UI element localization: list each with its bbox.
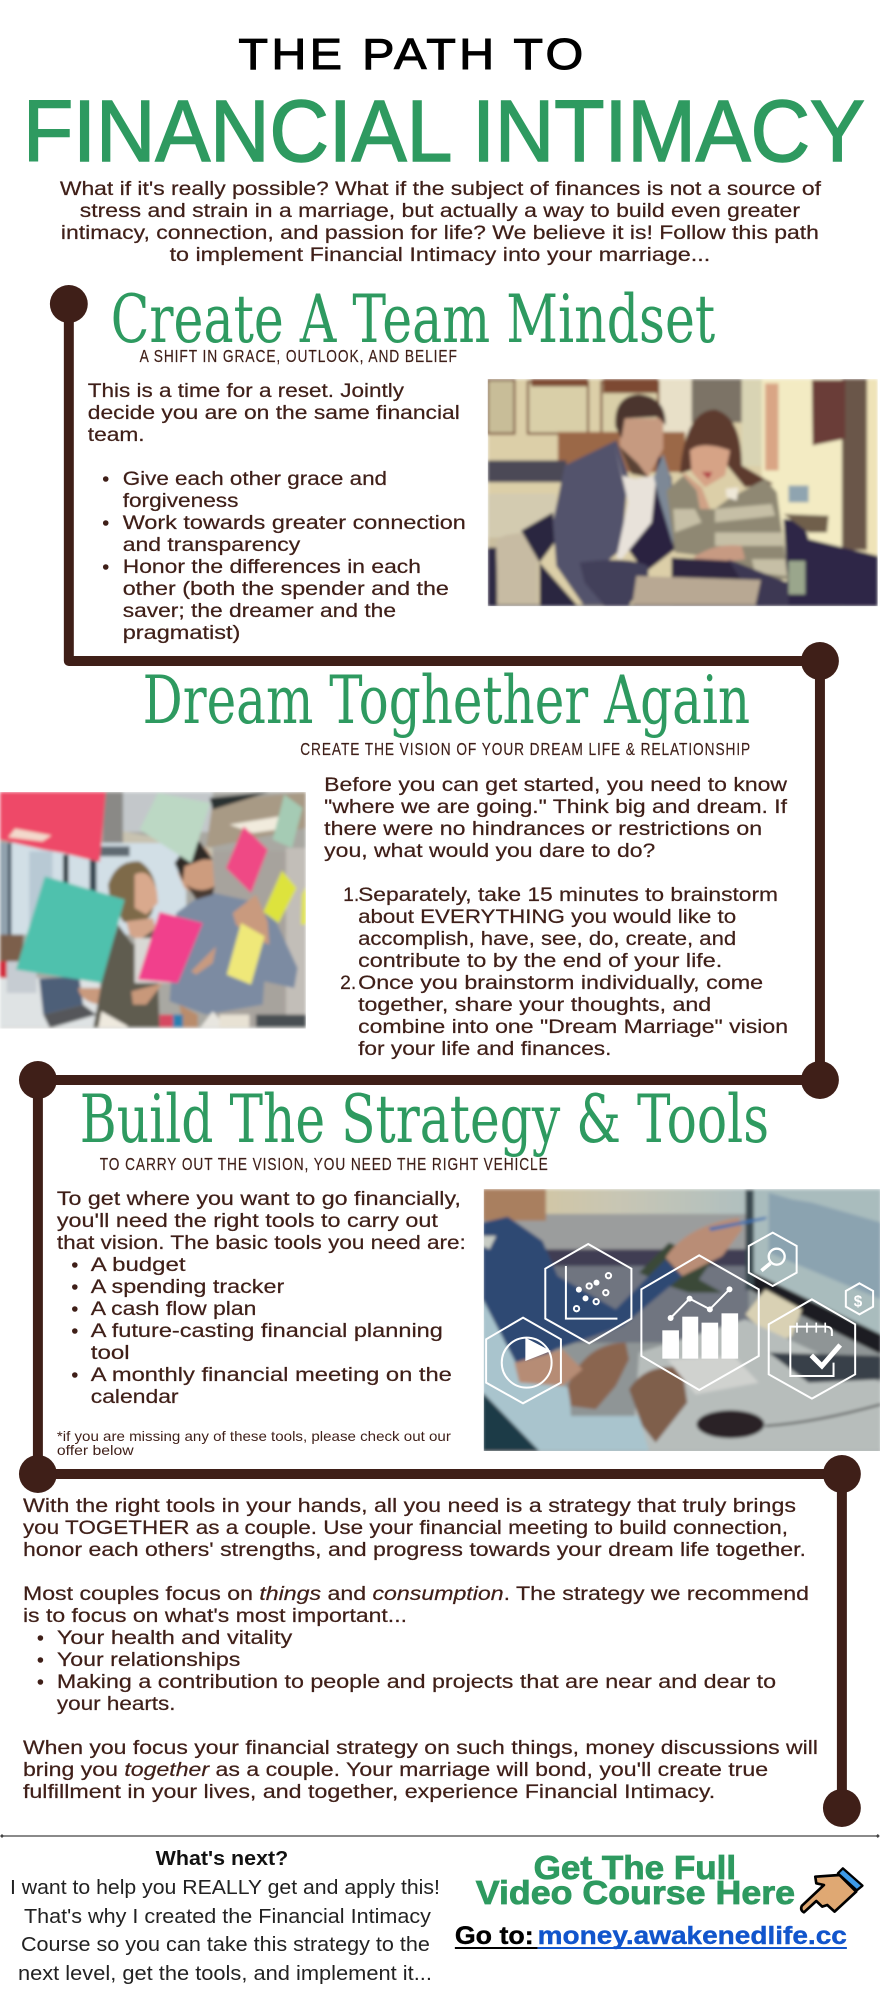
footnote: offer below [57,1443,134,1458]
section 2 body text: Once you brainstorm individually, come [358,972,763,994]
icon: pointing hand [801,1868,862,1912]
section 3 body text: A cash flow plan [91,1298,256,1320]
intro text block: stress and strain in a marriage, but actually a way to build even greater [80,200,801,222]
strategy body text: Most couples focus on things and consumption . The strategy we recommend [23,1583,809,1605]
section 2 body text: accomplish, have, see, do, create, and [358,928,736,950]
intro text block [60,178,822,266]
subheading: create the vision: CREATE THE VISION OF YOUR DREAM LIFE & RELATIONSHIP [300,739,751,759]
strategy body text: Your relationships [57,1649,240,1671]
footnote [57,1429,451,1458]
section 2 body text: contribute to by the end of your life. [358,950,722,972]
strategy body text: your hearts. [57,1693,176,1715]
section 3 body text: tool [91,1342,130,1364]
strategy body text: is to focus on what's most important... [23,1605,407,1627]
go to link: Go to: [455,1922,534,1950]
call to action: get the full video course: Get The Full [534,1849,736,1886]
call to action: get the full video course: Video Course Here [476,1874,795,1911]
section 2 body text: 2. [340,972,356,994]
divider line [0,1834,880,1838]
what's next text block: Course so you can take this strategy to the [21,1933,430,1956]
photo: couple at laptop [488,379,878,606]
section 3 body text: you'll need the right tools to carry out [57,1210,439,1232]
section 3 body text: A monthly financial meeting on the [91,1364,452,1386]
section 1 body text: other (both the spender and the [123,578,449,600]
section 1 body text: and transparency [123,534,301,556]
what's next text block: That's why I created the Financial Intimacy [24,1905,432,1928]
strategy body text: honor each others' strengths, and progress towards your dream life together. [23,1539,806,1561]
what's next text block [10,1847,440,1985]
section 1 body text: Work towards greater connection [123,512,466,534]
strategy body text: Your health and vitality [57,1627,293,1649]
section 3 body text: A spending tracker [91,1276,285,1298]
section 3 body text [57,1188,466,1408]
intro text block: What if it's really possible? What if the subject of finances is not a source of [60,178,822,200]
section 1 body text: team. [88,424,145,446]
section 2 body text: Before you can get started, you need to know [324,774,788,796]
winding path connector [19,285,861,1827]
section 2 body text: 1. [343,884,359,906]
photo: hands with analytics icons [483,1189,880,1452]
section 2 body text [324,774,788,1060]
photo: hands with analytics icons: $ [854,1294,863,1311]
subheading: to carry out the vision: TO CARRY OUT THE VISION, YOU NEED THE RIGHT VEHICLE [100,1154,549,1174]
section 2 body text: Separately, take 15 minutes to brainstorm [358,884,778,906]
go to link: money.awakenedlife.cc [538,1922,847,1950]
section 1 body text: Give each other grace and [123,468,387,490]
strategy body text: bring you together as a couple. Your marriage will bond, you'll create true [23,1759,768,1781]
section 1 body text [88,380,466,644]
what's next text block: next level, get the tools, and implement it... [18,1962,432,1985]
section 1 body text: forgiveness [123,490,238,512]
subheading: a shift in grace: A SHIFT IN GRACE, OUTLOOK, AND BELIEF [140,346,458,366]
section 1 body text: This is a time for a reset. Jointly [88,380,404,402]
footnote: *if you are missing any of these tools, please check out our [57,1429,451,1444]
call to action: get the full video course [476,1849,795,1911]
section 2 body text: there were no hindrances or restrictions on [324,818,762,840]
section 3 body text: A future-casting financial planning [91,1320,443,1342]
section 1 body text: saver; the dreamer and the [123,600,396,622]
section 3 body text: A budget [91,1254,186,1276]
section 2 body text: combine into one "Dream Marriage" vision [358,1016,788,1038]
intro text block: to implement Financial Intimacy into your marriage... [170,244,710,266]
strategy body text: When you focus your financial strategy on such things, money discussions will [23,1737,818,1759]
section 2 body text: about EVERYTHING you would like to [358,906,736,928]
intro text block: intimacy, connection, and passion for life? We believe it is! Follow this path [61,222,819,244]
section 2 body text: for your life and finances. [358,1038,611,1060]
strategy body text: With the right tools in your hands, all you need is a strategy that truly brings [23,1495,796,1517]
title: the path to: THE PATH TO [238,30,587,79]
what's next text block: I want to help you REALLY get and apply this! [10,1876,440,1899]
photo: couple with sticky notes [0,792,306,1029]
section 1 body text: Honor the differences in each [123,556,421,578]
section 3 body text: To get where you want to go financially, [57,1188,461,1210]
section 2 body text: "where we are going." Think big and dream. If [324,796,788,818]
section 3 body text: that vision. The basic tools you need are: [57,1232,466,1254]
strategy body text: you TOGETHER as a couple. Use your financial meeting to build connection, [23,1517,788,1539]
heading: create a team mindset: Create A Team Mindset [111,281,715,358]
section 1 body text: pragmatist) [123,622,240,644]
what's next text block: What's next? [156,1847,288,1870]
strategy body text: fulfillment in your lives, and together, experience Financial Intimacy. [23,1781,715,1803]
strategy body text: Making a contribution to people and projects that are near and dear to [57,1671,776,1693]
section 1 body text: decide you are on the same financial [88,402,460,424]
strategy body text [23,1495,818,1803]
section 2 body text: you, what would you dare to do? [324,840,656,862]
section 3 body text: calendar [91,1386,179,1408]
section 2 body text: together, share your thoughts, and [358,994,711,1016]
